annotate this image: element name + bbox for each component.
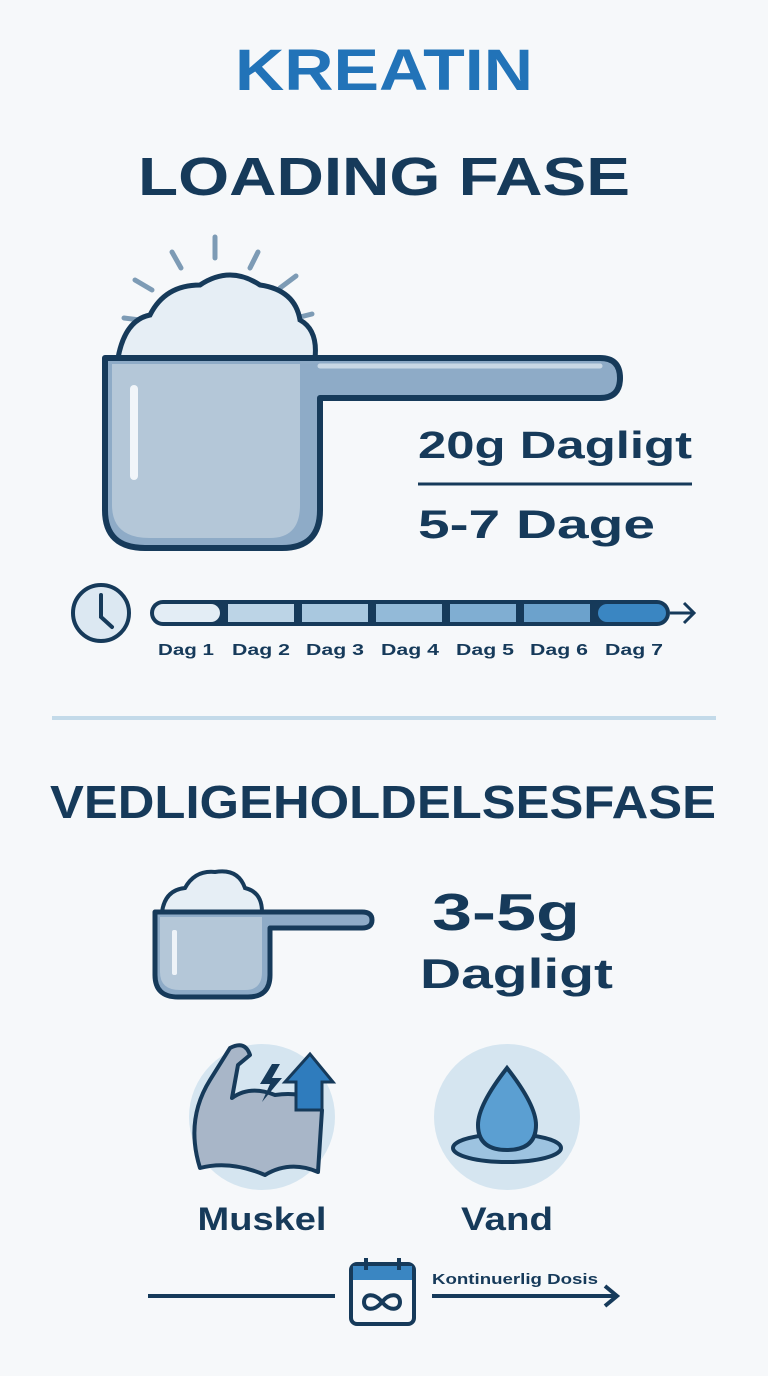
- heading: vedligeholdelsesfase: VEDLIGEHOLDELSESFASE: [50, 776, 716, 828]
- timeline bar: [150, 600, 694, 659]
- heading: loading fase: LOADING FASE: [138, 147, 630, 207]
- icon: large scoop: [105, 237, 620, 548]
- timeline bar: Dag 1: [158, 642, 214, 659]
- timeline bar: Dag 4: [381, 642, 439, 659]
- label: vand: Vand: [461, 1201, 553, 1237]
- timeline bar: Dag 5: [456, 642, 514, 659]
- icon: small scoop: [155, 871, 372, 997]
- text: 3-5g dagligt: 3-5g: [432, 884, 580, 942]
- icon: clock: [73, 585, 129, 641]
- text: 3-5g dagligt: [420, 884, 613, 997]
- arrow: kontinuerlig dosis: Kontinuerlig Dosis: [432, 1271, 598, 1288]
- timeline bar: Dag 3: [306, 642, 364, 659]
- arrow: kontinuerlig dosis: [432, 1271, 617, 1306]
- timeline bar: Dag 6: [530, 642, 588, 659]
- icon: muscle: [189, 1044, 335, 1190]
- text: 3-5g dagligt: Dagligt: [420, 950, 613, 997]
- text: 20g dagligt: 20g Dagligt: [418, 425, 692, 467]
- timeline bar: Dag 7: [605, 642, 663, 659]
- text: 5-7 dage: 5-7 Dage: [418, 503, 655, 547]
- timeline bar: Dag 2: [232, 642, 290, 659]
- icon: water drop: [434, 1044, 580, 1190]
- title: KREATIN: [235, 38, 533, 103]
- icon: calendar infinity: [351, 1258, 414, 1324]
- label: muskel: Muskel: [198, 1201, 326, 1237]
